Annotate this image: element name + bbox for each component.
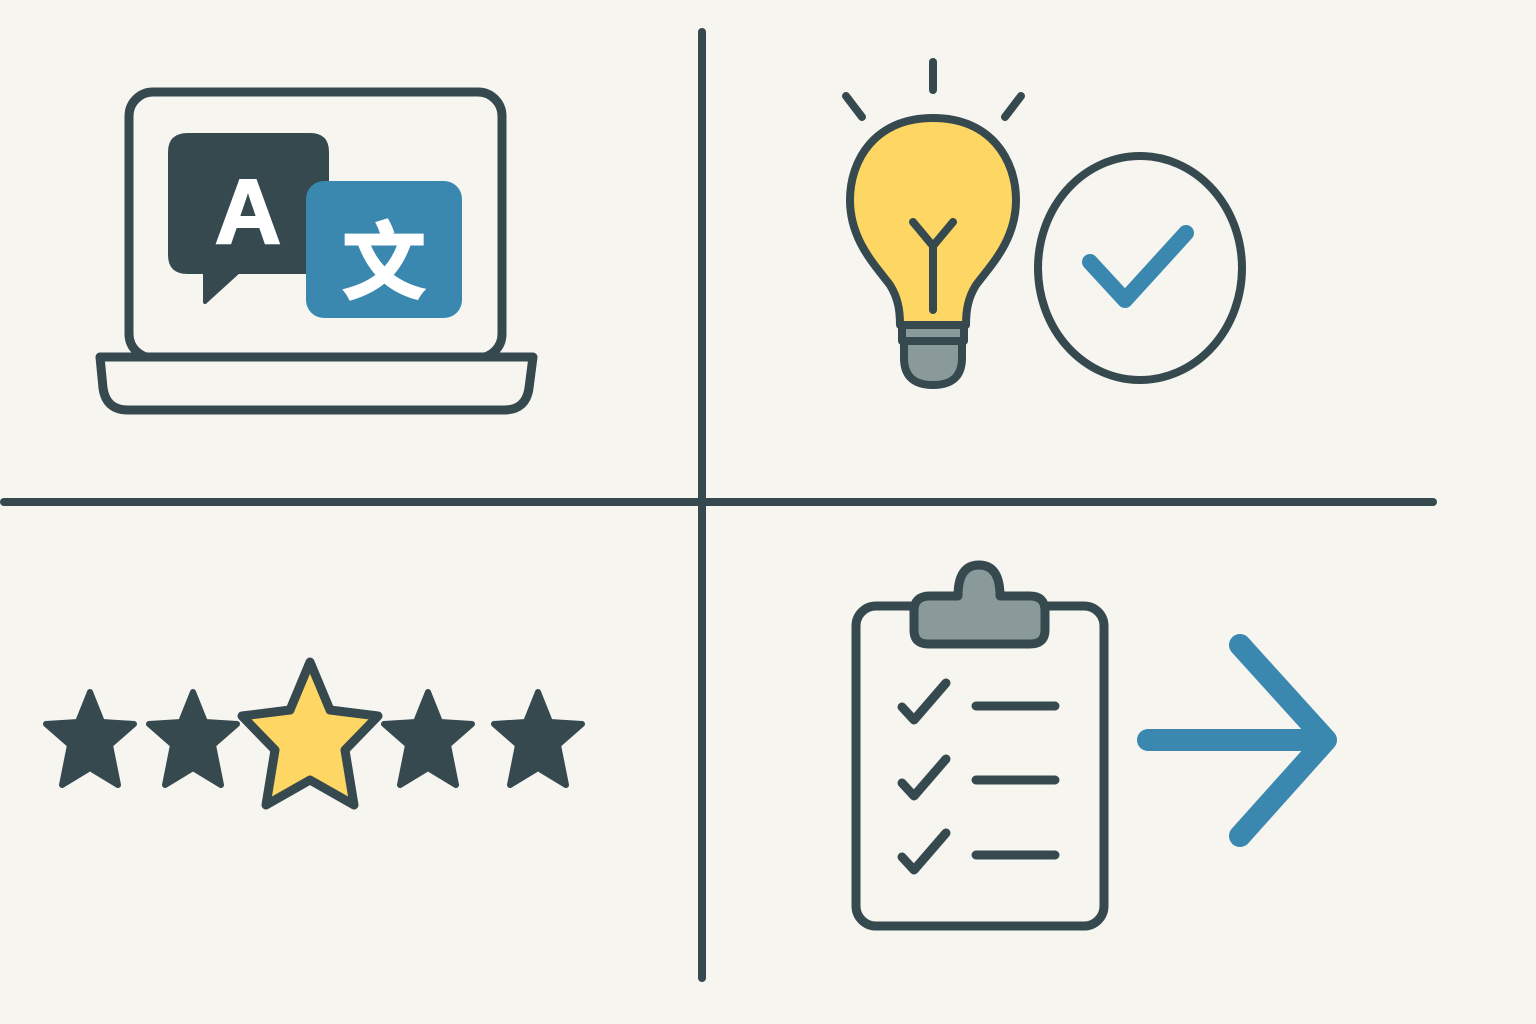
- icon: clipboard checklist: [856, 565, 1104, 926]
- icon: check circle: [1038, 156, 1242, 380]
- icon: laptop translation: [100, 92, 533, 410]
- icon: 文 speech bubble: [306, 181, 462, 318]
- icon: star rating: [46, 662, 582, 805]
- icon: arrow right: [1148, 645, 1326, 836]
- icon: 文 speech bubble: 文: [342, 216, 426, 310]
- icon: A speech bubble: [170, 135, 327, 302]
- icon: lightbulb: [846, 62, 1021, 385]
- icon: A speech bubble: A: [215, 161, 281, 263]
